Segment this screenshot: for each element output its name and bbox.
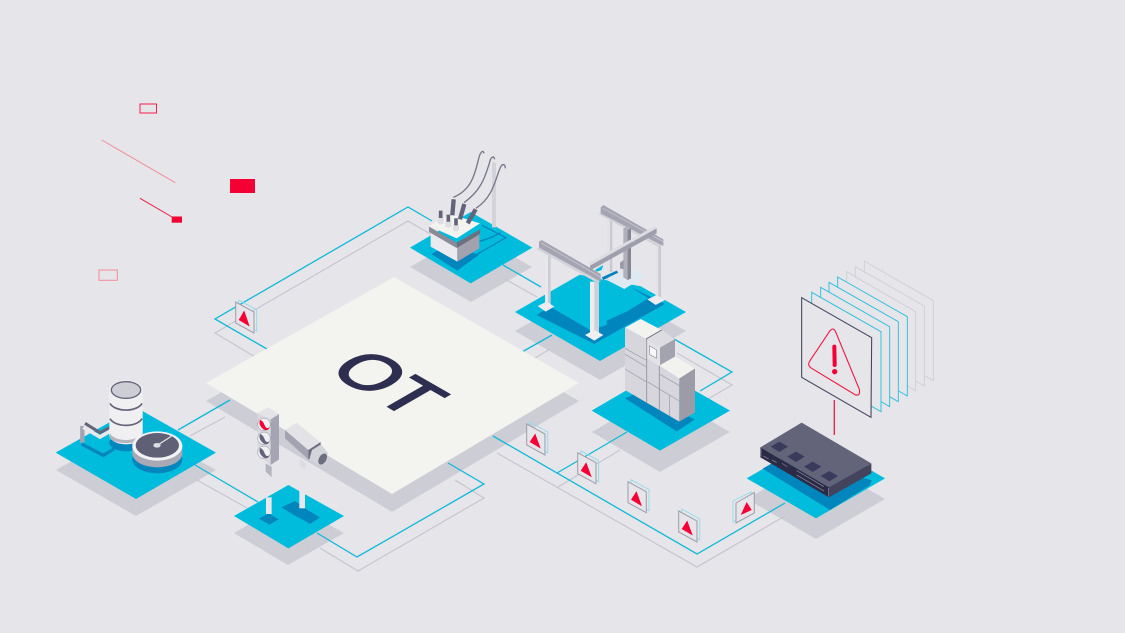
icon: gantry crane <box>537 205 665 341</box>
icon: electrical cabinets <box>625 319 695 422</box>
panel: transformer platform <box>410 151 532 283</box>
icon: gauge <box>132 431 182 473</box>
decorative red marks <box>99 104 255 280</box>
panel: stacked alert screens <box>802 261 933 417</box>
icon: alert tile 3 <box>578 451 599 484</box>
panel: central OT platform <box>206 277 579 494</box>
panel: data platform with storage and gauge <box>56 380 216 499</box>
icon: database cylinder <box>109 380 143 451</box>
icon: alert tile 6 <box>733 492 754 523</box>
front alert screen <box>802 298 872 417</box>
panel: traffic platform base <box>234 485 344 548</box>
icon: pipe <box>82 423 114 455</box>
icon: network appliance <box>760 423 871 497</box>
icon: alert tile 1 <box>236 300 257 333</box>
panel: cabinet platform <box>592 371 730 451</box>
panel: network device platform <box>747 423 885 518</box>
transformer cable lines on platform <box>474 225 506 256</box>
cyan conduit lines <box>178 207 785 557</box>
icon: transformer <box>429 151 505 262</box>
icon: traffic light <box>258 407 279 477</box>
arrow: red link from appliance to alert <box>833 400 835 435</box>
panel: gantry platform <box>515 205 686 361</box>
icon: security camera <box>285 423 329 470</box>
platform shadows <box>56 232 885 565</box>
icon: alert tile 5 <box>679 509 700 542</box>
icon: alert tile 2 <box>527 422 548 455</box>
icon: alert tile 4 <box>628 480 649 513</box>
icon: transmission pole <box>492 163 496 227</box>
heading: OT: OT <box>314 340 463 426</box>
icon: warning triangle <box>809 329 860 395</box>
grey conduit lines <box>190 221 785 571</box>
